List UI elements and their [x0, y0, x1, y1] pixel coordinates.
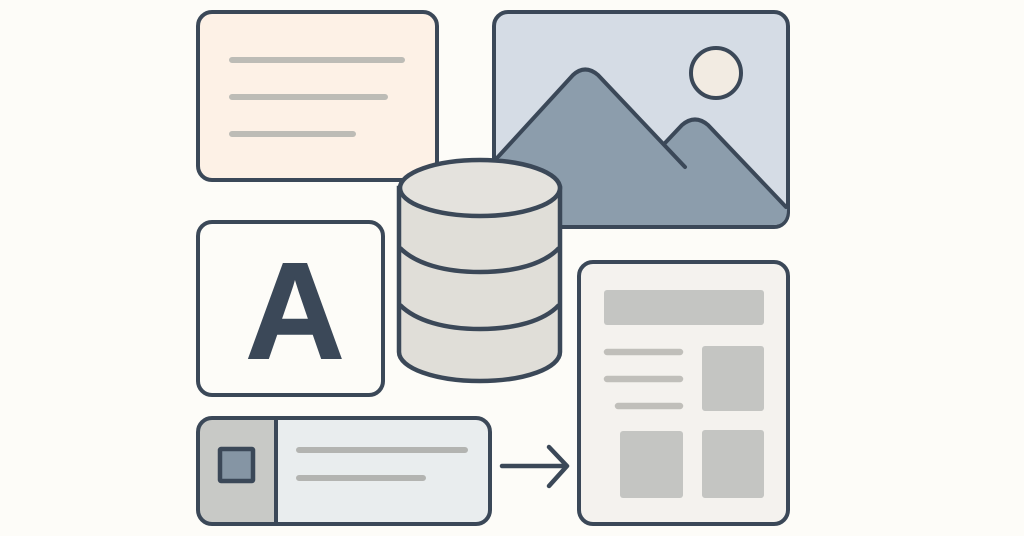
panel: text card	[198, 12, 437, 180]
panel: document page	[579, 262, 788, 524]
panel: list row	[198, 418, 490, 524]
icon: database	[399, 160, 560, 381]
arrow	[502, 447, 567, 486]
icon: sun	[691, 48, 741, 98]
letter A: A	[245, 234, 345, 388]
icon: mountains	[497, 70, 787, 225]
panel: letter card	[198, 222, 383, 395]
panel: image card	[494, 12, 788, 227]
icon: thumbnail square	[220, 449, 253, 481]
